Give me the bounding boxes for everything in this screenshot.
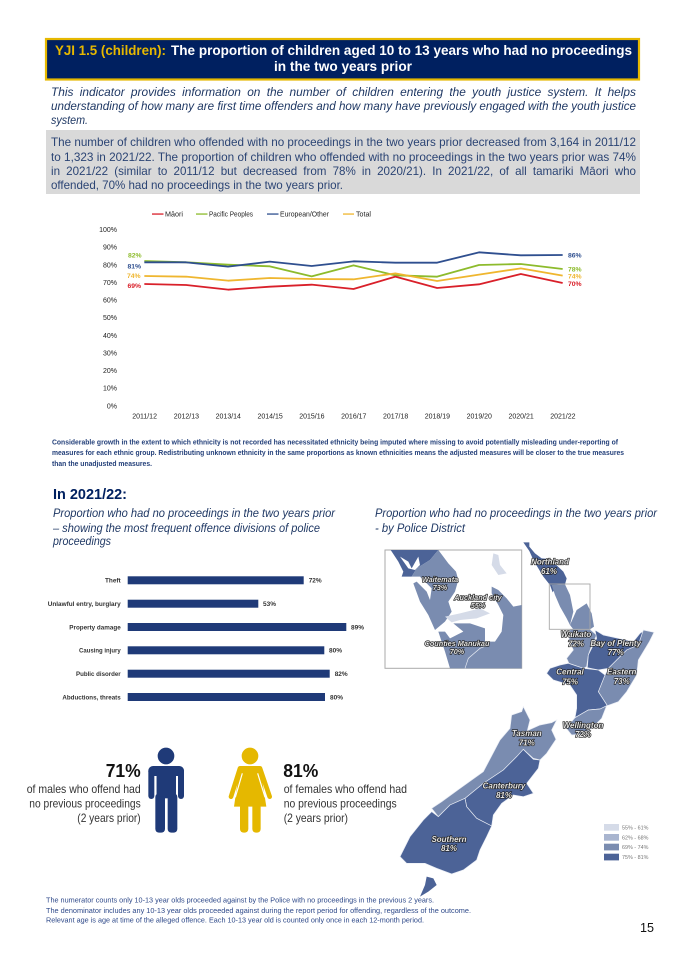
title banner: The proportion of children aged 10 to 13 years who had no proceedings bbox=[171, 42, 632, 58]
italic introduction text bbox=[51, 85, 636, 127]
ethnicity note bbox=[52, 438, 624, 468]
x axis labels: 2017/18 bbox=[383, 414, 408, 420]
map labels: Waikato bbox=[561, 630, 591, 639]
footnotes: The denominator includes any 10-13 year olds proceeded against during the report period for offending, regardless of the outcome. bbox=[46, 906, 471, 915]
italic introduction text: understanding of how many are first time offenders and how many have previously engaged with the youth justice bbox=[51, 99, 636, 113]
x axis labels bbox=[132, 414, 576, 420]
footnotes: The numerator counts only 10-13 year olds proceeded against by the Police with no proceedings in the previous 2 years. bbox=[46, 896, 434, 904]
male statistic bbox=[27, 748, 184, 833]
y axis labels: 100% bbox=[99, 227, 117, 234]
start and end data labels: 78% bbox=[568, 267, 582, 274]
male statistic: 71% bbox=[106, 760, 141, 781]
South Island bbox=[400, 707, 557, 897]
right subheading bbox=[375, 506, 658, 535]
map labels: 77% bbox=[608, 648, 624, 657]
male statistic: (2 years prior) bbox=[77, 811, 141, 825]
right subheading: - by Police District bbox=[375, 521, 465, 535]
bar chart: offence divisions bbox=[48, 576, 364, 701]
ethnicity note: measures for each ethnic group. Redistributing unknown ethnicity in the same proportions as known ethnicities means the adjusted measures will be closer to the true measures bbox=[52, 448, 624, 457]
map: police districts bbox=[385, 542, 654, 897]
x axis labels: 2018/19 bbox=[425, 414, 450, 420]
x axis labels: 2015/16 bbox=[299, 414, 325, 420]
chart legend: European/Other bbox=[280, 212, 330, 218]
female statistic: of females who offend had bbox=[284, 782, 407, 796]
map labels: 72% bbox=[568, 640, 584, 649]
y axis labels: 0% bbox=[107, 403, 117, 410]
bar chart: offence divisions: 53% bbox=[263, 601, 276, 608]
title banner bbox=[46, 39, 639, 80]
start and end data labels: 86% bbox=[568, 253, 582, 260]
start and end data labels bbox=[127, 252, 582, 290]
bar chart: offence divisions: Theft bbox=[105, 578, 121, 584]
x axis labels: 2014/15 bbox=[257, 414, 283, 420]
map labels: Wellington bbox=[563, 721, 603, 730]
left subheading bbox=[52, 506, 336, 548]
icon: female figure bbox=[231, 748, 270, 833]
x axis labels: 2011/12 bbox=[132, 414, 157, 420]
map labels: 55% bbox=[471, 601, 486, 610]
section heading: In 2021/22: bbox=[53, 486, 127, 503]
summary panel: to 1,323 in 2021/22. The proportion of children who offended with no proceedings in the two years prior was 74% bbox=[51, 150, 636, 164]
y axis labels: 60% bbox=[103, 298, 117, 304]
y axis labels: 30% bbox=[103, 350, 117, 358]
male statistic: no previous proceedings bbox=[29, 797, 141, 811]
map labels: 61% bbox=[541, 567, 557, 576]
map labels: Canterbury bbox=[483, 782, 526, 791]
bar chart: offence divisions: Abductions, threats bbox=[62, 694, 121, 701]
map legend: 62% - 68% bbox=[622, 835, 649, 841]
map labels: Eastern bbox=[607, 668, 636, 677]
map labels: 75% bbox=[562, 678, 578, 687]
y axis labels bbox=[99, 227, 117, 410]
x axis labels: 2012/13 bbox=[174, 414, 199, 420]
x axis labels: 2019/20 bbox=[467, 414, 492, 420]
y axis labels: 90% bbox=[103, 245, 117, 252]
map labels: Central bbox=[556, 668, 585, 677]
map labels: Bay of Plenty bbox=[590, 639, 642, 648]
start and end data labels: 74% bbox=[127, 273, 141, 280]
y axis labels: 70% bbox=[103, 280, 117, 287]
summary panel: The number of children who offended with no proceedings in the two years prior decreased from 3,164 in 2011/12 bbox=[51, 135, 636, 149]
ethnicity note: than the unadjusted measures. bbox=[52, 459, 152, 468]
map labels: Tasman bbox=[512, 729, 542, 738]
bar chart: offence divisions: 80% bbox=[330, 694, 343, 701]
bar chart: offence divisions: 89% bbox=[351, 624, 364, 631]
title banner: YJI 1.5 (children): bbox=[55, 42, 166, 58]
left subheading: Proportion who had no proceedings in the two years prior bbox=[53, 506, 336, 520]
chart lines bbox=[144, 252, 563, 290]
page number: 15 bbox=[640, 921, 654, 935]
start and end data labels: 82% bbox=[128, 252, 142, 260]
map labels: 73% bbox=[614, 677, 630, 686]
map labels: Southern bbox=[431, 835, 467, 844]
map labels: 72% bbox=[575, 730, 591, 739]
x axis labels: 2016/17 bbox=[341, 414, 367, 420]
y axis labels: 80% bbox=[103, 262, 117, 269]
map labels: 81% bbox=[496, 791, 512, 800]
footnotes bbox=[46, 896, 471, 924]
map legend: 55% - 61% bbox=[622, 825, 649, 831]
start and end data labels: 70% bbox=[568, 281, 582, 288]
female statistic: 81% bbox=[283, 760, 318, 781]
left subheading: proceedings bbox=[52, 534, 111, 548]
chart legend: Pacific Peoples bbox=[209, 212, 253, 218]
map legend: 69% - 74% bbox=[622, 845, 649, 851]
bar chart: offence divisions: Causing injury bbox=[79, 648, 121, 655]
y axis labels: 20% bbox=[103, 368, 117, 375]
italic introduction text: This indicator provides information on the number of children entering the youth justice system. It helps bbox=[51, 85, 636, 99]
line chart: proportion by ethnicity bbox=[99, 212, 582, 420]
map labels: Northland bbox=[531, 558, 570, 566]
ethnicity note: Considerable growth in the extent to which ethnicity is not recorded has necessitated ethnicity being imputed where missing to avoid potentially misleading under-reporting of bbox=[52, 438, 619, 446]
map labels: 73% bbox=[433, 583, 448, 592]
map labels: 81% bbox=[441, 844, 457, 853]
map labels: 70% bbox=[450, 647, 465, 656]
bar chart: offence divisions: 80% bbox=[329, 648, 342, 655]
chart legend: Māori bbox=[165, 212, 183, 218]
italic introduction text: system. bbox=[51, 113, 88, 127]
x axis labels: 2013/14 bbox=[216, 414, 241, 420]
footnotes: Relevant age is age at time of the alleged offence. Each 10-13 year old is counted only once in each 12-month period. bbox=[46, 916, 424, 924]
bar chart: offence divisions: 82% bbox=[335, 671, 348, 678]
start and end data labels: 69% bbox=[128, 283, 141, 290]
x axis labels: 2021/22 bbox=[550, 414, 576, 420]
icon: male figure bbox=[148, 748, 184, 833]
chart legend bbox=[152, 212, 371, 218]
start and end data labels: 74% bbox=[568, 274, 582, 280]
left subheading: – showing the most frequent offence divisions of police bbox=[52, 521, 320, 535]
map labels bbox=[422, 558, 642, 853]
female statistic: (2 years prior) bbox=[284, 811, 348, 825]
bar chart: offence divisions: 72% bbox=[309, 578, 322, 584]
y axis labels: 40% bbox=[103, 333, 117, 340]
map labels: Counties Manukau bbox=[425, 639, 490, 648]
male statistic: of males who offend had bbox=[27, 782, 141, 796]
bar chart: offence divisions: Property damage bbox=[69, 624, 121, 631]
female statistic bbox=[231, 748, 407, 833]
y axis labels: 50% bbox=[103, 315, 117, 322]
map legend bbox=[604, 824, 649, 861]
map labels: Waitemata bbox=[422, 575, 458, 584]
bar chart: offence divisions: Unlawful entry, burglary bbox=[48, 601, 121, 608]
x axis labels: 2020/21 bbox=[508, 414, 534, 420]
summary panel bbox=[46, 130, 640, 194]
start and end data labels: 81% bbox=[128, 264, 141, 271]
summary panel: in 2021/22 (similar to 2011/12 but decreased from 78% in 2020/21). In 2021/22, of all tamariki Māori who bbox=[51, 164, 636, 178]
main map inset marker bbox=[549, 584, 590, 629]
map labels: 71% bbox=[519, 739, 535, 748]
map legend: 75% - 81% bbox=[622, 855, 649, 861]
Auckland inset bbox=[385, 550, 522, 668]
map labels: Auckland city bbox=[453, 593, 503, 602]
female statistic: no previous proceedings bbox=[284, 797, 397, 811]
chart legend: Total bbox=[356, 212, 371, 218]
y axis labels: 10% bbox=[103, 386, 117, 393]
summary panel: offended, 70% had no proceedings in the two years prior. bbox=[51, 178, 343, 192]
North Island bbox=[523, 542, 654, 735]
title banner: in the two years prior bbox=[274, 58, 413, 74]
bar chart: offence divisions: Public disorder bbox=[76, 671, 121, 678]
